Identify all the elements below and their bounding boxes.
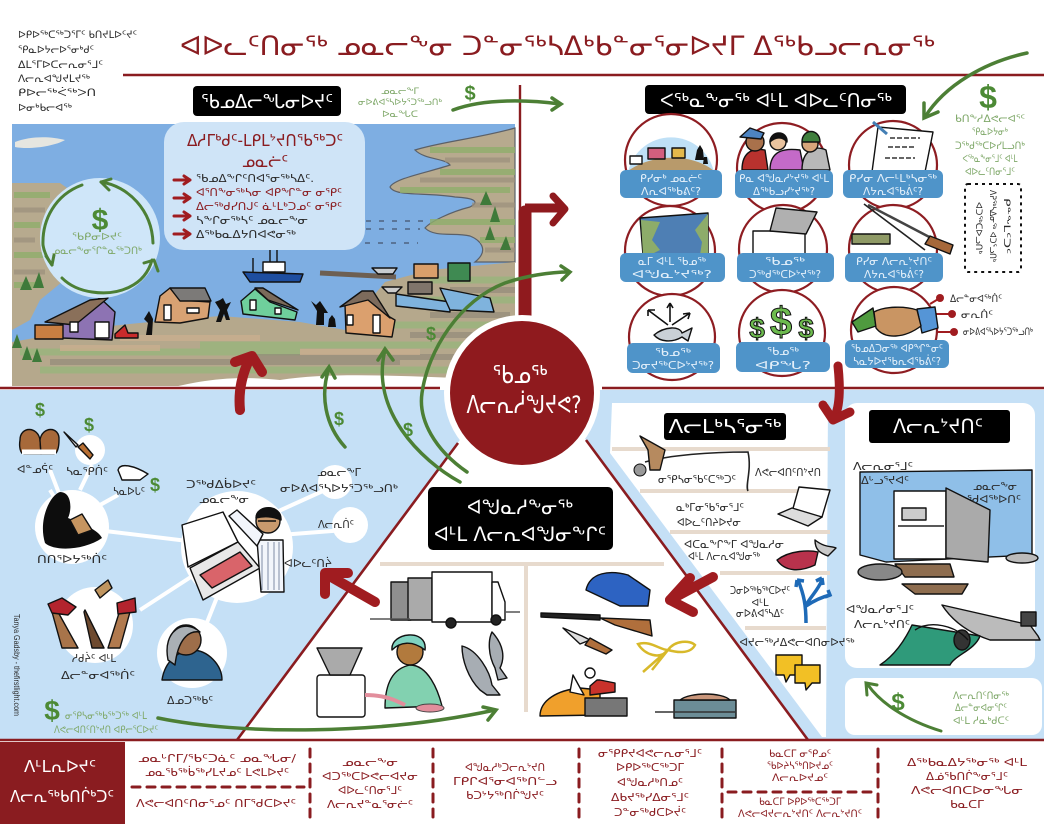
panel: key success factors: ᖃᐅᔨᓴᖅᑎᐅᔪᓄᑦ [767, 761, 833, 772]
dollars: $ [35, 400, 45, 420]
panel: key success factors: ᐱᓕᕆᐅᔪᓄᑦ [772, 773, 828, 784]
panel: key success factors: ᐃᖅᑲᓇᐃᔭᖅᓂᖅ ᐊᒻᒪ [907, 756, 1028, 769]
icon: fish [462, 632, 507, 695]
labels: ᐃᓕᓐᓂᐊᖅᑏᑦ [61, 669, 135, 682]
panel: economic loop bubble [40, 178, 160, 298]
icon: net [880, 625, 980, 665]
arrow: red to distribution [325, 573, 375, 602]
panel: key success factors: ᓄᓇᓕᖕᓂ [342, 756, 398, 769]
ship [243, 248, 303, 282]
green text: funding [955, 113, 1025, 178]
green income text: ᓂᕿᓴᓂᖅᑲᖅᑐᖅ ᐊᒻᒪ [65, 711, 148, 722]
card: fish distribution: ᑐᓂᔪᖅᑕᐅᔾᔪᖅ? [632, 359, 714, 372]
icon: dollar: $ [464, 83, 476, 105]
card: rifle and sled: ᐱᔭᕆᐊᖃᕖᑦ? [864, 268, 924, 281]
text block: organization credits: ᐅᓂᒃᑲᓕᐊᖅ [18, 102, 72, 114]
icon: meat [777, 540, 836, 570]
callout: community bubble: ᐃᓱᒥᒃᑯᑦ-ᒪᑭᒪᔾᔪᑎᖃᖅᑐᑦ [187, 131, 343, 150]
labels: ᐱᓕᕆᑏᑦ [318, 518, 354, 531]
card: plan document [843, 121, 943, 209]
training labels: ᐱᕙᓕᐊᑎᑦᑎᔾᔪᑎ [755, 467, 821, 479]
panel: key success factors: ᐊᐅᓚᑦᑎᓂᕐᒧᑦ [338, 784, 402, 797]
partner labels [950, 294, 1033, 338]
callout: community bubble [164, 122, 365, 250]
panel: key success factors: ᐱᒻᒪᕆᐅᔪᑦ [24, 757, 96, 776]
wharf [320, 273, 396, 277]
card: map: ᓇᒥ ᐊᒻᒪ ᖃᓄᖅ [638, 255, 706, 268]
dollars on arrows: $ [403, 420, 413, 440]
background: right blue region [549, 390, 1044, 740]
card: cost: $ [798, 313, 814, 344]
card: map [620, 206, 725, 296]
green income text: ᐱᕙᓕᐊᑎᑦᑎᔾᔪᑎ ᐊᑭᓕᕐᑕᐅᔪᑦ [54, 725, 158, 736]
callout: community bubble: ᖃᓄᐃᖕᒋᑦᑎᐊᕐᓂᖅᓴᐃᑦ. [196, 172, 314, 185]
icon: snowmobile [540, 668, 627, 716]
tools labels: ᓄᓇᓕᖕᓂ [973, 480, 1017, 493]
meat patties [365, 695, 405, 705]
arrows: green from triangle [322, 266, 570, 482]
callout: community bubble: ᓴᖕᒋᓂᖅᓴᑦ ᓄᓇᓕᖕᓂ [196, 214, 308, 227]
dashed note box: ᐱᕈᖅᓴᐃᓂᖅ ᐊᑐᕐᓗᑎᒃ [987, 190, 997, 262]
panel: tools card [845, 403, 1035, 668]
house: green [241, 288, 298, 320]
callout: community bubble: ᐊᕐᑎᖕᓂᖅᓴᓂ ᐊᑭᖏᓐᓂ ᓂᕿᑦ [196, 186, 342, 199]
labels: ᓄᓇᓕᖕᓂ [199, 493, 249, 506]
green text: community income [358, 87, 442, 120]
center circle [444, 315, 600, 471]
dollars on arrows [334, 324, 436, 440]
icon: dollar bottom: $ [44, 695, 60, 726]
card: rifle and sled [845, 204, 953, 293]
people silhouettes [144, 298, 336, 335]
card: freezer [737, 205, 834, 293]
card: freezer: ᖃᓄᖅ [765, 255, 805, 268]
card: cost: ᐊᑭᖓ? [755, 359, 811, 372]
house: orange [340, 291, 395, 337]
white torn edge [170, 375, 460, 390]
card: handshake partners: ᓴᓇᔭᐅᔪᖃᕆᐊᖃᕖᑦ? [853, 355, 941, 368]
card: cost: ᖃᓄᖅ [767, 345, 799, 358]
panel: key success factors: ᐊᖑᓇᓱᒃᑐᓕᕆᔾᔪᑎ [465, 761, 545, 774]
arrow: green top right [924, 53, 1027, 118]
divider lines [0, 75, 1044, 740]
panel: question grid [620, 114, 1033, 380]
panel: key success factors: ᑲᓇᑕᒥ ᐅᑭᐅᖅᑕᖅᑐᒥ [759, 797, 842, 808]
heading: community: ᖃᓄᐃᓕᖓᓂᐅᔪᑦ [201, 91, 333, 113]
labels: ᓴᓇᕐᑭᑏᑦ [66, 465, 108, 478]
tools labels [846, 460, 1021, 631]
house: purple [35, 298, 115, 340]
icon: blue branching arrows [796, 578, 830, 623]
tools labels: ᐊᖑᓇᓱᓂᕐᒧᑦ [846, 603, 914, 616]
panel: key success factors: ᓂᕿᑭᔪᐊᕙᓕᕆᓂᕐᒧᑦ [598, 747, 702, 760]
dollars on arrows: $ [334, 409, 344, 429]
icon: dollar: $ [92, 204, 109, 237]
panel: income arrow: ᐊᒻᒪ ᓱᓇᒃᑯᑕᑦ [953, 716, 1009, 727]
icon: fishing rod [634, 436, 749, 491]
loop arrows [43, 179, 158, 293]
green text: funding: ᑐᖅᑯᖅᑕᐅᓯᒪᓗᑎᒃ [955, 140, 1025, 152]
tools labels: ᐃᒡᓗᕐᔪᐊᑦ [861, 474, 909, 487]
icon: mittens [20, 430, 59, 454]
triangle outline [237, 440, 808, 740]
green text: community income: ᓄᓇᓕᖕᒥ [381, 87, 419, 97]
hands with meat [48, 580, 136, 648]
labels: ᓱᑯᔩᑦ ᐊᒻᒪ [72, 652, 117, 665]
labels: ᐊᐅᓚᑦᑎᔩ [284, 557, 332, 570]
icon: dollar large: $ [979, 79, 997, 115]
silhouette carver [43, 492, 102, 549]
arrow: red to equipment [670, 577, 713, 612]
icon: rifle [541, 613, 652, 636]
panel: training list: ᐱᓕᒪᒃᓴᕐᓂᖅ [668, 416, 782, 438]
panel: key success factors: ᑲᓇᑕᒥ ᓂᕿᓄᑦ [769, 749, 831, 760]
panel: income arrow: ᐱᓕᕆᑎᑦᑎᓂᖅ [953, 691, 1009, 702]
panel: key success factors: ᐱᓕᕆᔪᓐᓇᕐᓂᓖᑦ [327, 798, 413, 811]
snowmobile [115, 325, 138, 338]
bird dots fishing nets [352, 221, 430, 243]
card: people: ᑭᓇ ᐊᖑᓇᓱᔾᔪᖅ ᐊᒻᒪ [739, 172, 830, 185]
icon: boat [942, 605, 1040, 640]
tools labels: ᐱᓕᕆᓂᕐᒧᑦ [853, 460, 913, 473]
card: handshake partners [845, 287, 958, 373]
card: cost: $ [749, 313, 765, 344]
card: who lives here: ᑭᓯᓂᒃ ᓄᓇᓖᑦ [640, 172, 702, 185]
panel: key success factors: ᒥᑭᒋᐊᕐᓂᐊᖅᑎᓪᓗ [453, 775, 557, 788]
card: people: ᐃᖅᑲᓗᓯᔾᔪᖅ? [753, 185, 815, 198]
card: map: ᐊᖑᓇᔾᔪᖅ? [632, 268, 712, 281]
card: fish distribution [627, 294, 720, 380]
labels: ᐊᓐᓄᕌᑦ [17, 463, 53, 476]
panel: key success factors: ᓄᓇᖃᖅᑳᖅᓯᒪᔪᓄᑦ ᒪᕙᒪᐅᔪᑦ [145, 766, 289, 779]
panel: harvest and processing triangle: ᐊᒻᒪ ᐱᓕᕆᐊᖑᓂᖕᒋᑦ [434, 522, 606, 546]
labels: ᓂᐅᕕᐊᕐᓴᐅᔭᕐᑐᖅᓗᑎᒃ [280, 482, 399, 495]
dollars on arrows: $ [426, 324, 436, 344]
panel: key success factors: ᑲᓇᑕᒥ [950, 798, 985, 811]
panel: harvest and processing triangle: ᐊᖑᓇᓱᖕᓂᖅ [467, 495, 573, 519]
tools labels: ᐱᓕᕆᔾᔪᑎᑦ [854, 618, 910, 631]
card: plan document: ᑭᓯᓂ ᐱᓕᒻᒪᒃᓴᓂᖅ [849, 172, 937, 185]
loop caption [52, 231, 142, 257]
center circle: ᐱᓕᕆᓲᖑᔪᕙ? [466, 390, 582, 419]
dashed note box: ᐊᑐᖅᑕᐅᓗᑎᒃ [973, 202, 983, 254]
panel: income arrow: ᐃᓕᓐᓂᐊᓂᕐᒋᑦ [955, 703, 1007, 714]
card: cost [736, 290, 830, 376]
icon: seal [118, 466, 148, 480]
arrow: green bottom [158, 707, 496, 730]
training labels: ᐊᑕᓇᖕᒋᖕᒥ ᐊᖑᓇᓱᓂ [684, 539, 784, 551]
heading: harvest and operations: ᐸᖅᓇᖕᓂᖅ ᐊᒻᒪ ᐊᐅᓚᑦᑎᓂᖅ [660, 90, 892, 112]
panel: key success factors: ᐊᑐᖅᑕᐅᕙᓕᐊᔪᓂ [322, 770, 418, 783]
panel: key success factors: ᐱᕙᓕᐊᑎᑕᐅᓂᖓᓂ [911, 784, 1023, 797]
labels: ᐃᓄᑐᖅᑲᑦ [167, 694, 213, 707]
panel: income arrow [866, 683, 1009, 731]
card: fish distribution: ᖃᓄᖅ [655, 346, 691, 359]
training labels: ᐊᔪᓕᖅᓱᐃᕙᓕᐊᑎᓂᐅᔪᖅ [740, 637, 855, 649]
arrow: green to harvesting [453, 98, 561, 110]
loop caption: ᖃᑭᓂᐅᔪᑦ [72, 231, 122, 243]
card: who lives here [620, 114, 722, 206]
icon: sled load [655, 694, 736, 718]
background: left blue region [0, 390, 497, 740]
distant houses [408, 263, 470, 294]
text block: organization credits: ᕿᓇᐅᔭᓕᐅᕐᓂᒃᑯᑦ [18, 44, 94, 56]
dollars [35, 400, 160, 495]
small boats [372, 268, 402, 293]
panel: key success factors: ᑐᓐᓂᖅᑯᑕᐅᔫᑦ [614, 806, 686, 819]
panel: training card [610, 403, 828, 737]
icon: grinder [317, 648, 365, 717]
card: people [735, 123, 833, 213]
icon: ulu knife [563, 628, 612, 654]
callout: community bubble: ᐃᖅᑲᓇᐃᔭᑎᐊᕙᓂᖅ [196, 228, 296, 241]
green text: community income: ᓂᐅᕕᐊᕐᓴᐅᔭᕐᑐᖅᓗᑎᒃ [358, 98, 442, 108]
training labels: ᓇᒃᒥᓂᖃᕐᓂᕐᒧᑦ [676, 502, 744, 514]
panel: key success factors: ᐅᑭᐅᖅᑕᖅᑐᒥ [616, 761, 685, 774]
card: rifle and sled: ᑭᓯᓂ ᐱᓕᕆᔾᔪᑎᑦ [856, 255, 932, 268]
arrow: red up to community [235, 356, 262, 410]
panel: harvest and processing triangle [317, 487, 736, 718]
labels: ᓄᓇᓕᖕᒥ [317, 466, 362, 479]
panel: key success factors: ᐱᕙᓕᐊᔪᓕᕆᔾᔪᑎᑦ ᐱᓕᕆᔾᔪᑎᑦ [738, 809, 862, 820]
center circle: ᖃᓄᖅ [492, 361, 548, 389]
panel: tools [846, 410, 1040, 665]
card: plan document: ᐱᔭᕆᐊᖃᕖᑦ? [863, 185, 923, 198]
training labels: ᓂᐅᕕᐊᕐᓴᐃᑦ [736, 608, 784, 620]
training labels: ᑐᓂᐅᖅᑲᖅᑕᐅᔪᑦ [730, 585, 790, 597]
green text: funding: ᐊᐅᓚᑦᑎᓂᕐᒧᑦ [965, 166, 1015, 178]
panel: tools: ᐱᓕᕆᔾᔪᑎᑦ [893, 414, 983, 438]
icon: worker [385, 635, 442, 708]
text block: organization credits [18, 29, 137, 114]
title: ᐊᐅᓚᑦᑎᓂᖅ ᓄᓇᓕᖕᓂ ᑐᓐᓂᖅᓴᐃᒃᑲᓐᓂᕐᓂᐅᔪᒥ ᐃᖅᑲᓗᓕᕆᓂᖅ [180, 31, 935, 62]
icon: rope [638, 642, 695, 672]
heading: harvest and operations [645, 85, 906, 114]
panel: training list [612, 413, 855, 690]
panel: community landscape [12, 124, 515, 390]
callout: community bubble: ᐃᓕᖅᑯᓯᑎᒍᑦ ᓈᒻᒪᒃᑐᓄᑦ ᓂᕿᑦ [196, 200, 342, 213]
blue buildings [396, 288, 494, 312]
green income text [54, 711, 158, 736]
panel: income card [845, 678, 1042, 735]
panel: key success factors: ᐊᖑᓇᓱᒃᑎᓄᑦ [617, 776, 683, 789]
panel: income arrow: $ [891, 689, 905, 716]
heading: community [193, 86, 341, 116]
loop caption: ᓄᓇᓕᖕᓂᕐᒋᓐᓇᖅᑐᑎᒃ [52, 246, 142, 257]
labels [17, 463, 399, 707]
network links [50, 465, 345, 640]
node circles [35, 435, 368, 688]
icon: speech bubbles [776, 655, 820, 690]
panel: key success factors: ᐃᑲᔪᖅᓯᐃᓂᕐᒧᑦ [611, 791, 689, 804]
dashed note box [965, 184, 1021, 272]
green text: community income: ᐅᓇᖓᑕ [382, 110, 418, 120]
panel: key success factors: ᑲᑐᔾᔭᖅᑎᒌᖑᔪᑦ [466, 789, 544, 802]
card: handshake partners: ᖃᓄᐃᑐᓂᖅ ᐊᑭᖏᓐᓂᑦ [851, 342, 943, 355]
icon: sleeping bag [586, 573, 650, 606]
green text: funding: ᕿᓇᐅᔭᓂᒃ [972, 126, 1008, 138]
icon: laptop [778, 487, 830, 526]
labels: ᑐᖅᑯᐃᑳᐅᔪᑦ [186, 478, 256, 491]
training labels: ᐊᒻᒪ ᐱᓕᕆᐊᖑᓂᖅ [688, 551, 760, 563]
card: cost: $ [770, 300, 792, 344]
panel: key success factors: ᐱᓕᕆᖅᑲᑎᒌᒃᑐᑦ [10, 787, 114, 806]
labels: ᑎᑎᕐᐅᔭᖅᑏᑦ [37, 553, 107, 566]
icon: truck [370, 572, 520, 628]
vertical credit: Tanya Gadsby - thefirstlight.com [12, 614, 21, 716]
text block: organization credits: ᐅᑭᐅᖅᑕᖅᑐᕐᒥᑦ ᑲᑎᔪᒪᐅᑦᔪᑦ [18, 29, 137, 41]
freezer and man [182, 508, 284, 600]
green text: funding: ᐸᖅᓇᖕᓂᕐᒧᑦ ᐊᒻᒪ [962, 153, 1018, 165]
dollars: $ [84, 415, 94, 435]
green text: funding: ᑲᑎᖕᓱᐃᕙᓕᐊᕐᑦ [955, 113, 1025, 125]
panel: key success factors: ᐃᓅᖃᑎᒌᖕᓂᕐᒧᑦ [926, 770, 1008, 783]
card: freezer: ᑐᖅᑯᖅᑕᐅᔾᔪᖅ? [749, 268, 821, 281]
card: who lives here: ᐱᕆᐊᖅᑲᕕᑦ? [641, 185, 701, 198]
trees [12, 191, 511, 362]
partner labels: ᓂᕆᑏᑦ [961, 310, 993, 321]
arrow: red up to plan [525, 196, 565, 318]
labels: ᓴᓇᐅᒐᑦ [113, 485, 145, 498]
training labels: ᓂᕿᓴᓂᖃᑦᑕᖅᑐᑦ [658, 474, 736, 486]
text block: organization credits: ᑭᐅᓕᖅᐹᖅᐳᑎ [18, 86, 96, 99]
panel: key success factors: ᐱᕙᓕᐊᑎᑦᑎᓂᕐᓄᑦ ᑎᒥᖁᑕᐅᔪᑦ [136, 797, 296, 810]
elder [162, 625, 222, 680]
dollars: $ [150, 475, 160, 495]
panel: left distribution [12, 400, 399, 736]
training labels: ᐊᒻᒪ [751, 597, 769, 609]
callout: community bubble: ᓄᓇᓖᑦ [242, 152, 288, 171]
training labels [658, 467, 855, 649]
text block: organization credits: ᐃᒪᕐᒥᐅᑕᓕᕆᓂᕐᒧᑦ [18, 59, 103, 71]
partner labels: ᐃᓕᓐᓂᐊᖅᑏᑦ [950, 294, 1002, 305]
carving [70, 514, 92, 535]
text block: organization credits: ᐱᓕᕆᐊᖑᔪᒪᔪᖅ [18, 73, 90, 85]
icon: processing container [858, 470, 1038, 594]
icon: knife [64, 432, 93, 459]
dashed note box: ᑭᓐᖕᒪᑦᑐᑦ [1001, 198, 1011, 254]
tools labels: ᖁᐊᖅᐅᑎᑦ [967, 493, 1021, 506]
panel: key success factors: ᓄᓇᒡᒋᒥ/ᖃᑦᑐᓈᑦ ᓄᓇᖓᓂ/ [138, 752, 296, 765]
house: tan [155, 288, 211, 323]
arrow: red down to training [823, 366, 850, 420]
training labels: ᐊᐅᓚᑦᑎᔨᐅᔪᓂ [677, 517, 741, 529]
panel: key success factors [0, 742, 1028, 824]
